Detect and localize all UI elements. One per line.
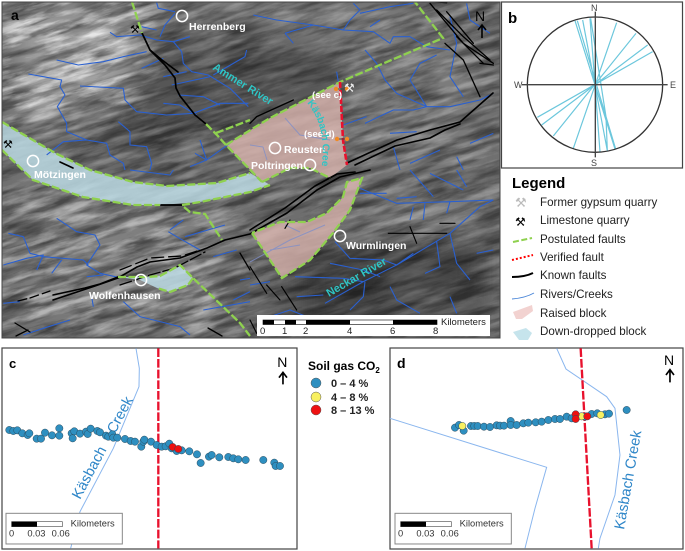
scale bar d: 0.03 — [416, 529, 434, 539]
legend labels: Limestone quarry — [540, 214, 630, 227]
down-dropped blocks — [2, 122, 270, 292]
town labels: Reusten — [284, 144, 325, 156]
label c: c — [9, 356, 16, 371]
town markers — [27, 10, 346, 286]
legend symbols: ⚒ — [515, 215, 526, 229]
sample points d — [451, 406, 630, 434]
soil gas legend: 0 – 4 % — [331, 378, 369, 390]
legend — [512, 175, 657, 340]
soil gas legend: 8 – 13 % — [331, 405, 375, 417]
soil gas legend: 4 – 8 % — [331, 392, 369, 404]
scale bar a: Kilometers — [441, 317, 486, 328]
scale bar a: 1 — [282, 326, 287, 337]
legend labels: Known faults — [540, 269, 607, 282]
panel b: rose diagram: E — [670, 80, 676, 90]
creeks d — [390, 348, 620, 548]
scale bar a: 2 — [303, 326, 308, 337]
scale bar d: 0.06 — [441, 529, 459, 539]
scale bar c: 0.03 — [27, 529, 45, 539]
creek c — [71, 348, 139, 548]
legend symbols — [512, 196, 534, 340]
legend: Legend — [512, 175, 565, 192]
label a: a — [11, 7, 19, 23]
creek label c: Käsbach Creek — [69, 394, 137, 502]
legend labels — [540, 196, 657, 338]
scale bar c: Kilometers — [71, 518, 115, 528]
north arrow a: N — [475, 8, 485, 24]
legend symbols: ⚒ — [515, 196, 527, 211]
soil gas legend: 2 — [375, 366, 380, 375]
soil gas legend: Soil gas CO — [308, 359, 375, 373]
river labels: Neckar River — [324, 255, 389, 300]
scale bar d — [395, 513, 511, 544]
icon: gypsum quarry: ⚒ — [344, 81, 355, 95]
orange profile markers — [334, 87, 349, 141]
scale bar a: 8 — [433, 326, 438, 337]
raised blocks — [226, 82, 362, 278]
town labels: Herrenberg — [189, 21, 246, 33]
scale bar a: 6 — [390, 326, 395, 337]
panel b: rose diagram: W — [514, 80, 523, 90]
icon: limestone quarry west: ⚒ — [3, 138, 13, 151]
river labels: Ammer River — [210, 61, 275, 108]
verified fault — [340, 82, 347, 165]
town labels: Wurmlingen — [346, 240, 406, 252]
north arrow c — [277, 354, 287, 384]
north arrow c: N — [277, 354, 287, 370]
panel d — [390, 348, 683, 549]
creek label d: Käsbach Creek — [612, 429, 645, 531]
scale bar d: 0 — [398, 529, 403, 539]
see labels: (see d) — [304, 129, 335, 140]
legend labels: Rivers/Creeks — [540, 288, 613, 301]
see labels: (see c) — [312, 90, 342, 101]
panel b: rose diagram — [502, 2, 682, 168]
panel a: map — [2, 2, 500, 338]
legend labels: Former gypsum quarry — [540, 196, 657, 209]
scale bar a — [257, 315, 490, 337]
known faults — [15, 2, 493, 336]
scale bar c: 0.06 — [52, 529, 70, 539]
icon: limestone quarry: ⚒ — [130, 23, 140, 36]
hillshade terrain — [2, 2, 500, 338]
panel c — [2, 348, 297, 549]
town labels: Mötzingen — [34, 169, 86, 181]
panel b: rose diagram: N — [591, 3, 598, 13]
panel b: rose diagram: S — [591, 158, 597, 168]
see labels — [304, 90, 342, 140]
scale bar c — [6, 513, 122, 544]
stereonet lines — [522, 12, 668, 157]
scale bar a: 0 — [260, 326, 265, 337]
legend labels: Postulated faults — [540, 233, 626, 246]
river labels — [212, 64, 386, 297]
scale bar a: 4 — [347, 326, 352, 337]
rivers and creeks — [3, 3, 493, 335]
north arrow d: N — [664, 352, 674, 368]
north arrow a — [475, 8, 486, 38]
north arrow d — [664, 352, 674, 382]
legend labels: Verified fault — [540, 251, 605, 264]
legend labels: Raised block — [540, 307, 607, 320]
town labels: Wolfenhausen — [89, 290, 161, 302]
legend labels: Down-dropped block — [540, 325, 647, 338]
town labels: Poltringen — [251, 160, 303, 172]
scale bar c: 0 — [9, 529, 14, 539]
soil gas legend — [308, 359, 380, 417]
label b: b — [508, 10, 517, 27]
fault line d — [581, 348, 592, 548]
scale bar d: Kilometers — [460, 518, 504, 528]
fault line c — [155, 348, 162, 548]
town labels — [34, 21, 406, 302]
label d: d — [397, 355, 406, 371]
postulated faults — [2, 2, 443, 336]
sample points c — [6, 425, 284, 470]
